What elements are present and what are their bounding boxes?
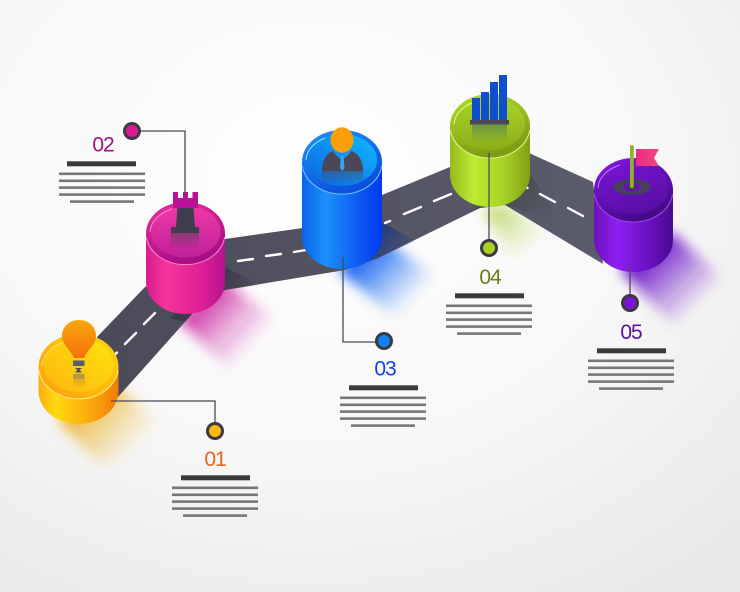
cylinder 1: yellow [38, 320, 118, 424]
cylinder 3: blue [302, 127, 382, 269]
connector 01 [111, 401, 215, 431]
road dashes [116, 187, 583, 354]
road shadow patches [170, 172, 560, 322]
cylinder 4: green [450, 75, 530, 207]
icon: chess rook [171, 192, 199, 250]
text block 03 [340, 385, 426, 427]
node 01 [206, 422, 224, 440]
text block 04 [446, 293, 532, 335]
text block 02 [59, 161, 145, 203]
text block 05 [588, 348, 674, 390]
icon: business person [322, 127, 363, 185]
cylinder 5: purple [594, 145, 673, 272]
label 03: 03 [374, 358, 396, 380]
shadows of cylinders [57, 204, 730, 465]
connector 03 [343, 257, 384, 342]
road [97, 150, 603, 397]
cylinder 2: pink [146, 192, 225, 314]
node 02 [123, 122, 141, 140]
label 04: 04 [479, 266, 502, 289]
node 05 [621, 294, 639, 312]
node 04 [480, 239, 498, 257]
connector 05 [629, 265, 631, 303]
icon: bar chart [470, 75, 509, 142]
label 01: 01 [204, 448, 226, 471]
icon: target with flag [613, 145, 659, 195]
icon: light bulb with hourglass [62, 320, 96, 389]
text block 01 [172, 475, 258, 517]
connector 04 [488, 153, 490, 248]
node 03 [375, 332, 393, 350]
label 02: 02 [92, 134, 114, 156]
connector 02 [132, 131, 185, 195]
label 05: 05 [620, 321, 642, 344]
